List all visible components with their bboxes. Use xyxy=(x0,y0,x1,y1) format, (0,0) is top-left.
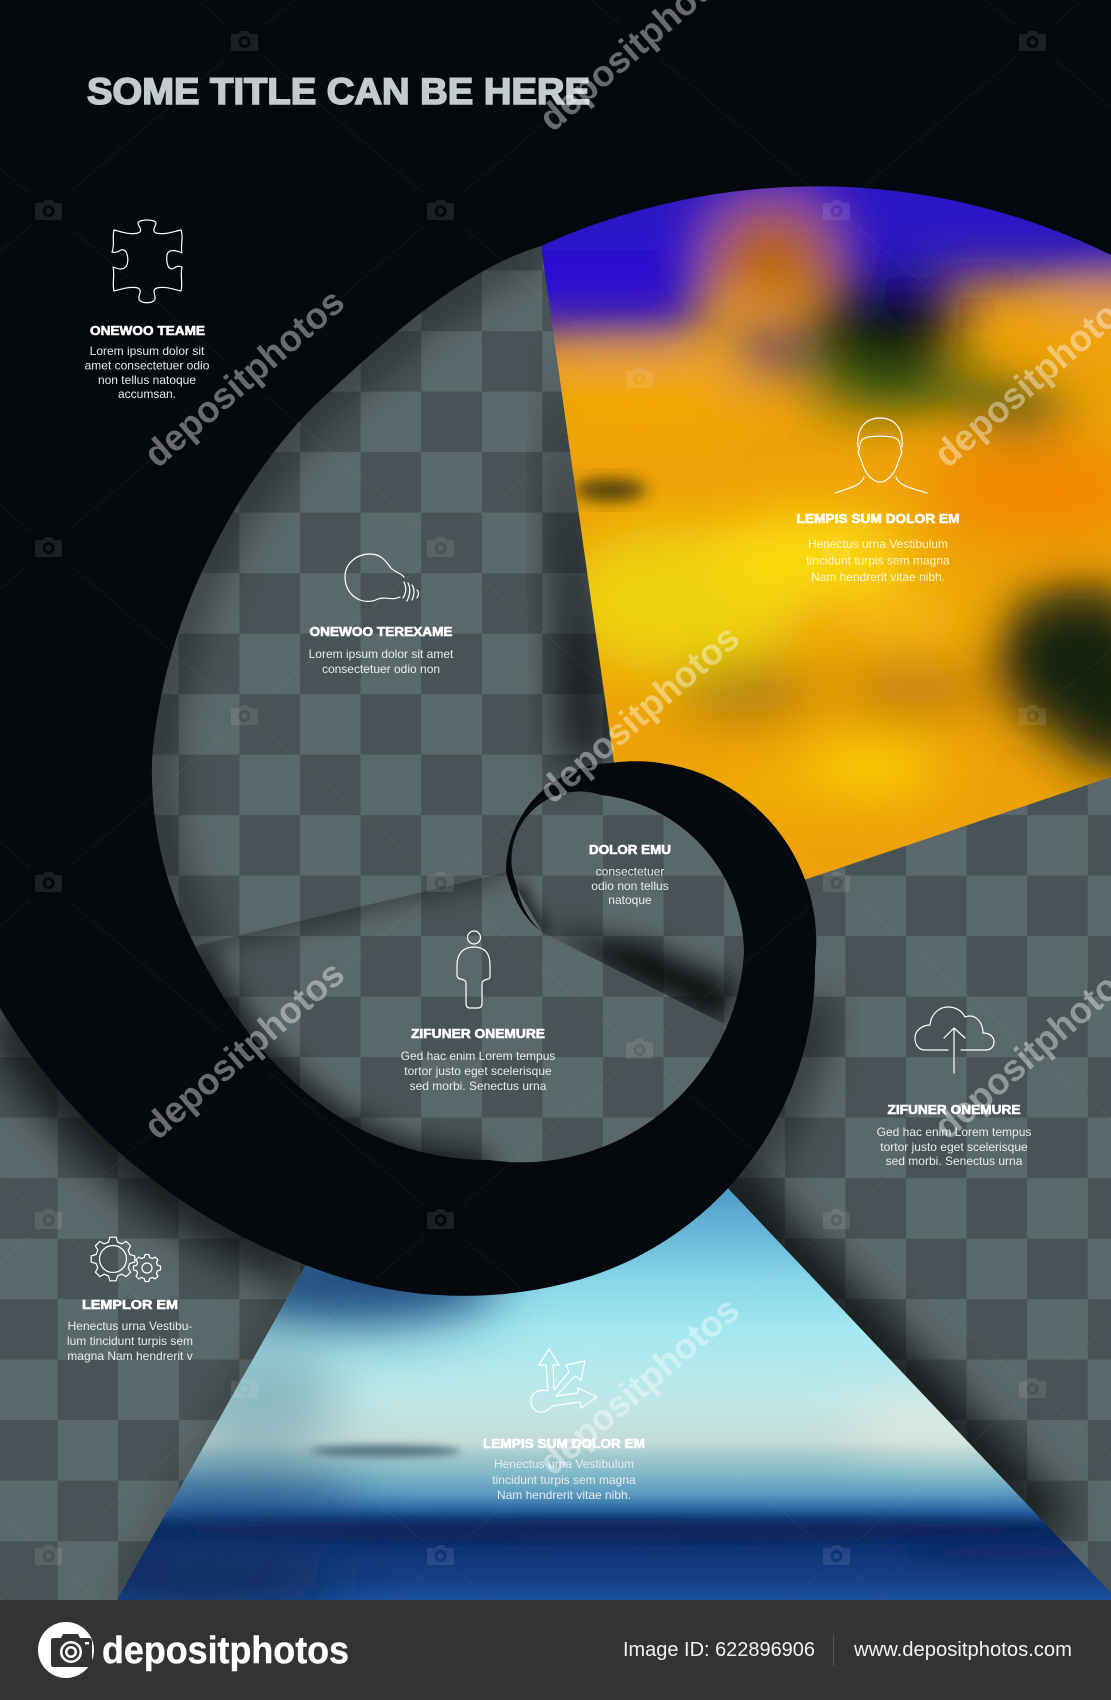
panel: yellow blurred photo wedge xyxy=(541,186,1111,880)
text: Lorem ipsum dolor sit amet xyxy=(309,647,454,661)
text: natoque xyxy=(608,893,652,907)
text: Ged hac enim Lorem tempus xyxy=(401,1049,555,1063)
text: Henectus urna Vestibulum xyxy=(494,1457,634,1471)
text: magna Nam hendrerit v xyxy=(67,1349,193,1363)
text: Ged hac enim Lorem tempus xyxy=(877,1125,1031,1139)
title: SOME TITLE CAN BE HERE xyxy=(87,71,590,112)
watermark text: depositphotos xyxy=(531,1289,747,1483)
icon: person xyxy=(457,931,490,1008)
heading: ZIFUNER ONEMURE xyxy=(888,1103,1020,1117)
block: zifuner onemure (center) xyxy=(401,931,555,1093)
wordmark: depositphotos xyxy=(102,1630,349,1672)
icon: gears xyxy=(91,1237,161,1282)
footer image id: Image ID: 622896906 xyxy=(623,1639,815,1661)
watermark text: depositphotos xyxy=(136,953,352,1147)
text: lum tincidunt turpis sem xyxy=(67,1334,193,1348)
heading: ONEWOO TEAME xyxy=(90,324,205,338)
text: consectetuer odio non xyxy=(322,662,440,676)
icon: light bulb xyxy=(345,554,418,601)
spiral band and black background cover xyxy=(0,0,1111,1296)
block: lempis sum dolor em (yellow) xyxy=(796,418,960,584)
icon: three arrows xyxy=(531,1349,597,1412)
heading: ONEWOO TEREXAME xyxy=(310,625,452,639)
watermark text xyxy=(136,0,1111,1483)
panel: checker base with right and lower-left gray areas xyxy=(0,248,1111,1600)
footer url: www.depositphotos.com xyxy=(853,1639,1072,1661)
block: onewoo teame xyxy=(85,220,210,401)
heading: DOLOR EMU xyxy=(589,843,671,857)
text: non tellus natoque xyxy=(98,373,196,387)
text: Nam hendrerit vitae nibh. xyxy=(811,570,945,584)
watermark text: depositphotos xyxy=(136,281,352,475)
text: Henectus urna Vestibulum xyxy=(808,537,948,551)
footer bar xyxy=(0,1600,1111,1700)
icon: camera in circle xyxy=(38,1622,94,1678)
panel: upper-left wedge area xyxy=(152,246,614,945)
panel: center bubble area xyxy=(514,876,742,1028)
icon: puzzle piece xyxy=(112,220,182,303)
text: consectetuer xyxy=(596,864,664,878)
text: tortor justo eget scelerisque xyxy=(880,1140,1028,1154)
text: accumsan. xyxy=(118,387,176,401)
text: tincidunt turpis sem magna xyxy=(492,1473,636,1487)
panel: middle wedge area xyxy=(194,872,726,1162)
panel: blue blurred photo wedge xyxy=(117,1188,1111,1600)
heading: LEMPIS SUM DOLOR EM xyxy=(796,512,960,526)
icon: man head xyxy=(835,418,927,493)
block: lempis sum dolor em (blue) xyxy=(483,1349,645,1502)
text: Nam hendrerit vitae nibh. xyxy=(497,1488,631,1502)
heading: ZIFUNER ONEMURE xyxy=(411,1027,545,1041)
heading: LEMPIS SUM DOLOR EM xyxy=(483,1437,645,1451)
block: zifuner onemure (right) xyxy=(877,1007,1031,1168)
text: Henectus urna Vestibu- xyxy=(68,1319,192,1333)
heading: LEMPLOR EM xyxy=(82,1298,178,1312)
text: sed morbi. Senectus urna xyxy=(410,1079,547,1093)
text: tortor justo eget scelerisque xyxy=(404,1064,552,1078)
text: amet consectetuer odio xyxy=(85,358,210,372)
text: sed morbi. Senectus urna xyxy=(886,1154,1023,1168)
text: odio non tellus xyxy=(591,879,669,893)
icon: cloud upload xyxy=(915,1007,994,1073)
footer logo xyxy=(38,1622,349,1678)
text: Lorem ipsum dolor sit xyxy=(90,344,205,358)
block: dolor emu xyxy=(589,843,671,907)
block: lemplor em xyxy=(67,1237,193,1363)
block: onewoo terexame xyxy=(309,554,454,676)
watermark text: depositphotos xyxy=(531,617,747,811)
text: tincidunt turpis sem magna xyxy=(806,554,950,568)
